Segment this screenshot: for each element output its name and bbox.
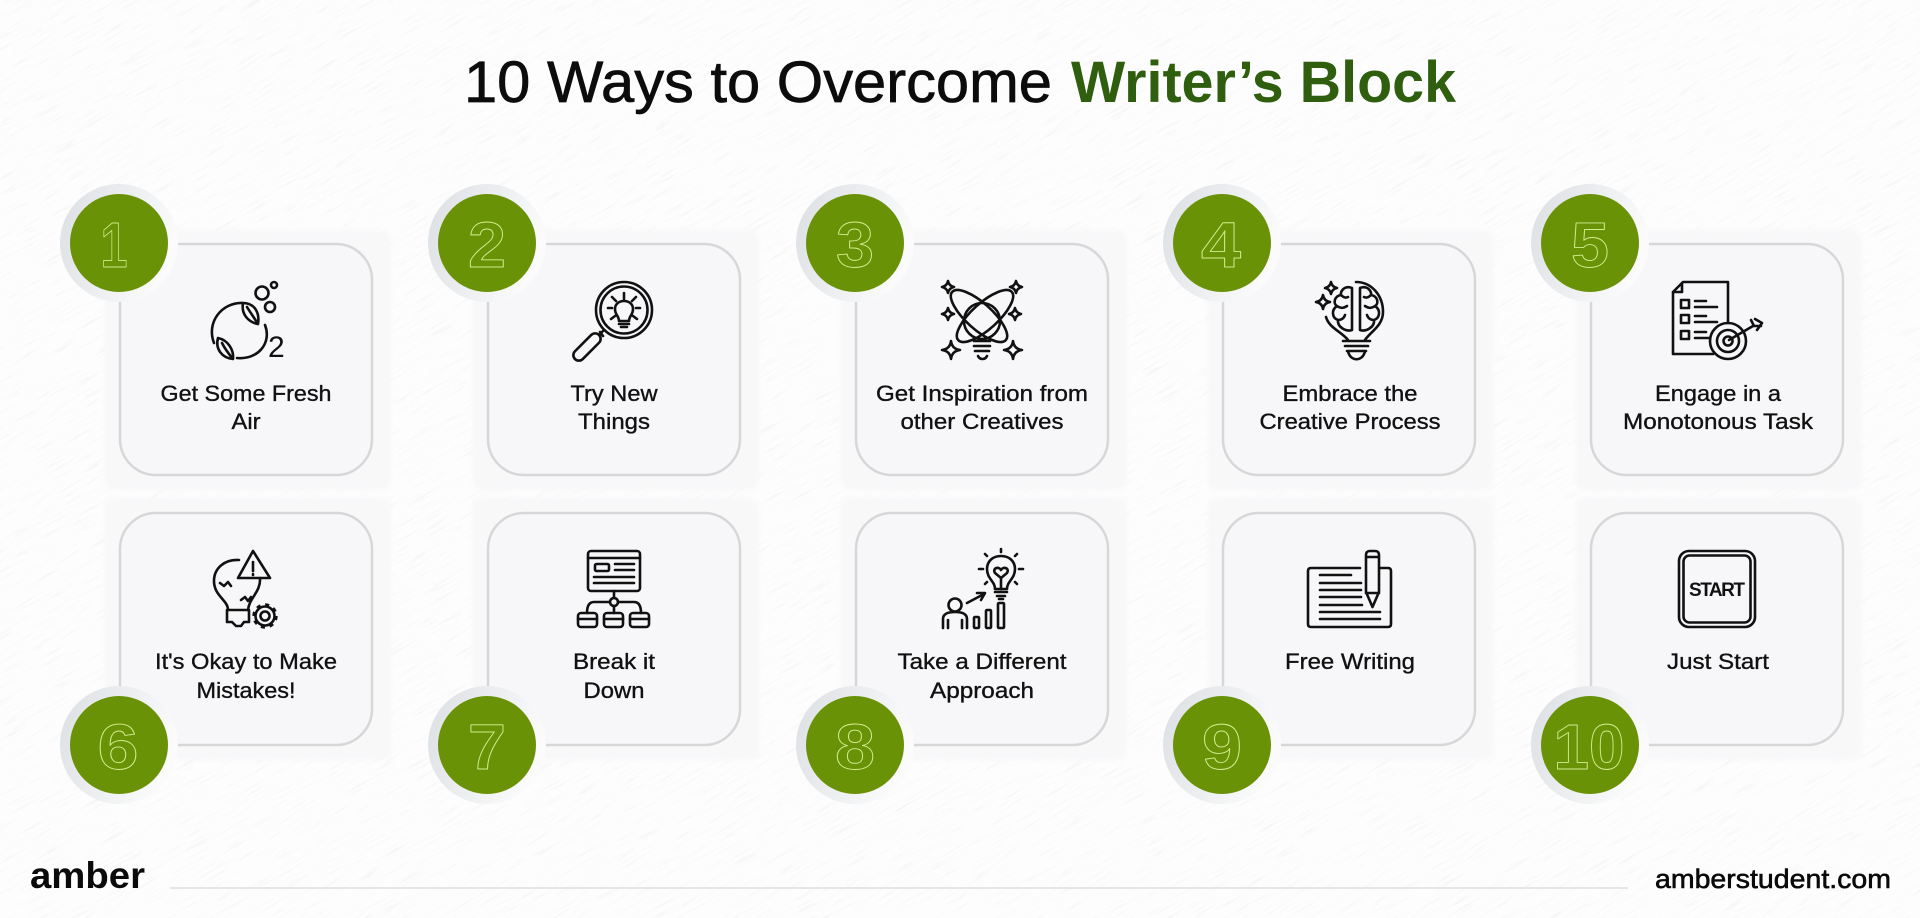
number badge 8	[796, 686, 914, 804]
text: step 1 label: Air	[232, 409, 260, 434]
panel: step 6 okay to make mistakes	[60, 498, 390, 804]
number badge 4	[1163, 184, 1281, 302]
text: step 10 label: Just Start	[1667, 649, 1769, 674]
footer website: amberstudent.com	[1655, 864, 1891, 894]
text: step 2 label	[570, 381, 658, 434]
icon: flow chart	[578, 551, 649, 627]
text: step 5 label	[1623, 381, 1814, 434]
number badge 8: 8	[835, 711, 875, 783]
panel: step 2 try new things	[428, 184, 758, 490]
title: 10 Ways to Overcome	[464, 50, 1052, 115]
number badge 1: 1	[100, 209, 128, 281]
panel: step 9 free writing	[1163, 498, 1493, 804]
panel: step 3 inspiration	[796, 184, 1126, 490]
number badge 2: 2	[468, 209, 506, 281]
text: step 7 label: Down	[584, 678, 644, 703]
number badge 3: 3	[836, 209, 874, 281]
icon: cracked bulb warning gear	[214, 551, 276, 627]
panel: step 4 embrace creative process	[1163, 184, 1493, 490]
text: step 8 label: Take a Different	[898, 649, 1066, 674]
icon: oxygen globe with leaves	[212, 282, 285, 364]
text: step 3 label	[876, 381, 1088, 434]
number badge 10	[1531, 686, 1649, 804]
text: step 3 label: Get Inspiration from	[876, 381, 1088, 406]
icon: start key: START	[1689, 580, 1745, 601]
number badge 6: 6	[98, 711, 138, 783]
number badge 9: 9	[1202, 711, 1242, 783]
text: step 3 label: other Creatives	[900, 409, 1064, 434]
panel: step 8 take a different approach	[796, 498, 1126, 804]
text: step 7 label	[573, 649, 655, 703]
footer brand logo: amber	[30, 855, 145, 896]
number badge 10: 10	[1554, 711, 1624, 783]
icon: brain bulb	[1316, 282, 1383, 359]
number badge 4: 4	[1201, 209, 1241, 281]
text: step 5 label: Engage in a	[1655, 381, 1782, 406]
number badge 1	[60, 184, 178, 302]
number badge 2	[428, 184, 546, 302]
icon: oxygen globe with leaves: 2	[268, 331, 285, 364]
number badge 9	[1163, 686, 1281, 804]
text: step 4 label	[1260, 381, 1440, 434]
number badge 5: 5	[1571, 209, 1609, 281]
text: step 7 label: Break it	[573, 649, 655, 674]
text: step 4 label: Creative Process	[1260, 409, 1440, 434]
icon: checklist with target	[1673, 282, 1762, 359]
number badge 5	[1531, 184, 1649, 302]
text: step 1 label: Get Some Fresh	[160, 381, 332, 406]
icon: magnifier with bulb	[571, 282, 652, 363]
number badge 7: 7	[468, 711, 506, 783]
panel: step 10 just start	[1531, 498, 1861, 804]
number badge 6	[60, 686, 178, 804]
panel: step 5 monotonous task	[1531, 184, 1861, 490]
panel: step 7 break it down	[428, 498, 758, 804]
text: step 4 label: Embrace the	[1282, 381, 1418, 406]
text: step 9 label: Free Writing	[1285, 649, 1415, 674]
title	[464, 50, 1457, 115]
text: step 2 label: Try New	[570, 381, 658, 406]
number badge 7	[428, 686, 546, 804]
text: step 5 label: Monotonous Task	[1623, 409, 1814, 434]
number badge 3	[796, 184, 914, 302]
icon: person growth bulb	[943, 549, 1023, 628]
icon: paper with pencil	[1308, 551, 1391, 627]
text: step 6 label: It's Okay to Make	[155, 649, 337, 674]
panel: step 1 get some fresh air	[60, 184, 390, 490]
text: step 6 label: Mistakes!	[196, 678, 296, 703]
icon: bulb with orbits and stars	[942, 281, 1022, 359]
text: step 6 label	[155, 649, 337, 703]
text: step 8 label: Approach	[930, 678, 1034, 703]
icon: start key	[1679, 551, 1755, 627]
text: step 1 label	[160, 381, 332, 434]
text: step 8 label	[898, 649, 1066, 703]
title: Writer’s Block	[1071, 50, 1457, 115]
text: step 2 label: Things	[578, 409, 650, 434]
